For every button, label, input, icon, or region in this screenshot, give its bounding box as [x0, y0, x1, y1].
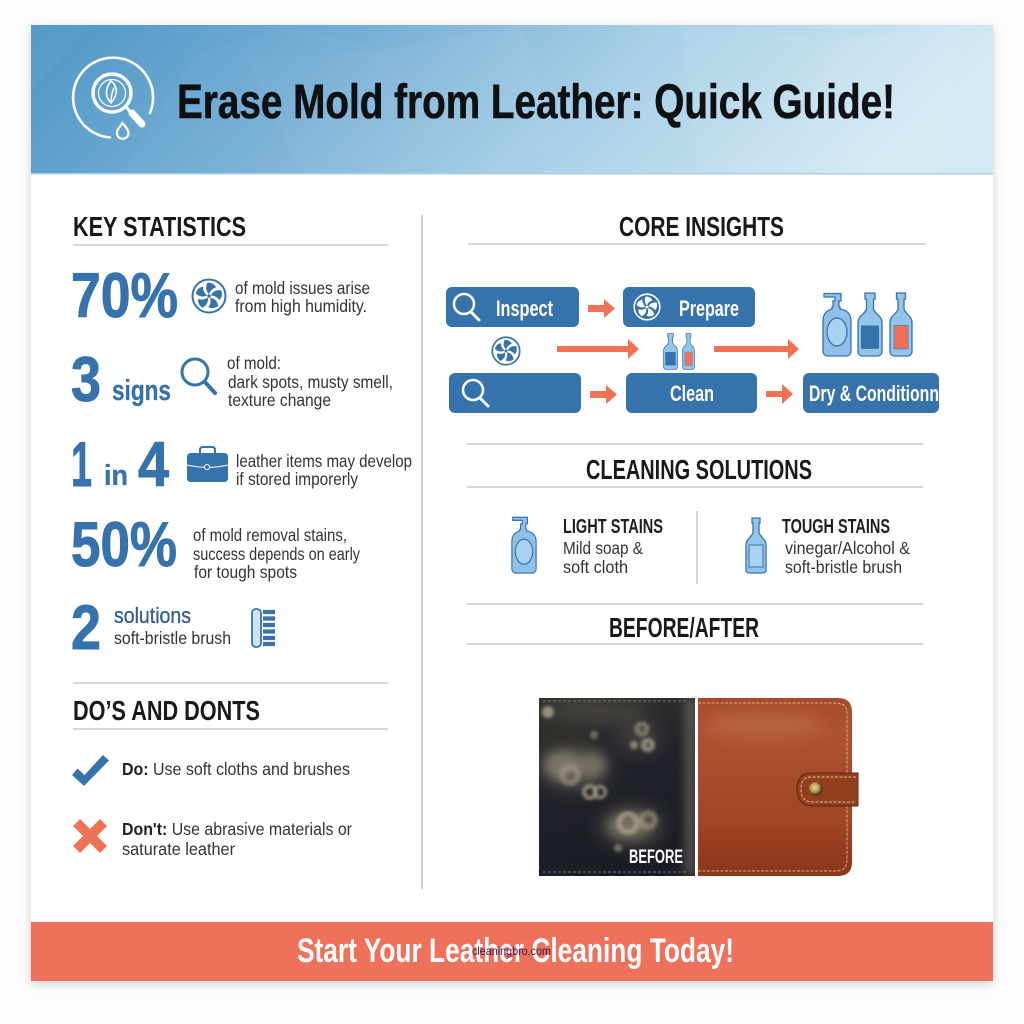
tough stains: soft-bristle brush: [785, 557, 902, 577]
tough stains: vinegar/Alcohol &: [785, 538, 910, 558]
stat: 3 signs: signs: [112, 375, 171, 407]
light stains: [563, 516, 663, 577]
stat: 70%: [71, 261, 370, 331]
stat: 2 solutions: [71, 593, 275, 663]
label: before: BEFORE: [629, 847, 683, 868]
stat: 1 in 4: in: [104, 460, 128, 492]
stat: 1 in 4: [71, 430, 412, 500]
panel: before and after: [467, 612, 923, 876]
light stains: LIGHT STAINS: [563, 516, 663, 538]
icon: small bottles: [664, 334, 694, 369]
stat: 1 in 4: leather items may develop: [236, 451, 412, 471]
header banner: [31, 25, 993, 174]
stat: 1 in 4: if stored imporerly: [236, 469, 358, 489]
stat: 3 signs: of mold:: [227, 353, 281, 373]
step: clean: [626, 373, 757, 413]
stat: 70%: from high humidity.: [235, 296, 367, 316]
heading: key statistics: KEY STATISTICS: [73, 211, 246, 242]
icon: soap bottle: [512, 517, 536, 573]
stat: 3 signs: dark spots, musty smell,: [228, 372, 393, 392]
arrow: middle right: [714, 339, 799, 359]
stat: 2 solutions: soft-bristle brush: [114, 628, 231, 648]
stat: 1 in 4: 4: [138, 430, 169, 500]
step: inspect: Inspect: [496, 296, 553, 321]
stat: 2 solutions: solutions: [114, 603, 191, 628]
arrow: middle left: [557, 339, 639, 359]
stat: 70%: 70%: [71, 261, 178, 331]
light stains: soft cloth: [563, 557, 628, 577]
stat: 3 signs: [71, 345, 393, 415]
icon: check: [72, 755, 109, 786]
panel: key statistics: [71, 211, 412, 663]
icon: fan: [492, 337, 520, 365]
stat: 1 in 4: 1: [71, 430, 92, 500]
panel: do's and don'ts: [72, 695, 388, 859]
image: clean wallet: [698, 698, 858, 876]
heading: cleaning solutions: CLEANING SOLUTIONS: [586, 454, 812, 485]
stat: 2 solutions: 2: [71, 593, 101, 663]
panel: cleaning solutions: [467, 454, 923, 584]
icon: bottle: [746, 518, 766, 573]
stat: 50%: of mold removal stains,: [193, 525, 347, 545]
icon: cross: [73, 819, 107, 853]
footer banner: [31, 922, 993, 981]
heading: before/after: BEFORE/AFTER: [609, 612, 759, 643]
arrow: search to clean: [590, 385, 617, 404]
step: unnamed search: [449, 373, 581, 413]
icon: magnifier with leaf and water drop: [73, 58, 153, 139]
step: dry and condition: [803, 373, 939, 413]
tough stains: TOUGH STAINS: [782, 516, 890, 538]
stat: 50%: 50%: [71, 510, 177, 580]
stat: 50%: [71, 510, 360, 582]
tough stains: [782, 516, 910, 577]
do text: Do: Use soft cloths and brushes: [122, 759, 350, 779]
heading: do's and don'ts: DO’S AND DONTS: [73, 695, 260, 726]
stat: 50%: success depends on early: [193, 544, 360, 564]
stat: 70%: of mold issues arise: [235, 278, 370, 298]
step: inspect: [446, 287, 579, 327]
divider: columns: [421, 215, 423, 889]
watermark: cleaningbro.com: [472, 944, 551, 958]
icon: large bottles: [823, 293, 912, 356]
light stains: Mild soap &: [563, 538, 643, 558]
arrow: clean to dry: [766, 384, 793, 404]
don't text line 2: saturate leather: [122, 839, 235, 859]
step: prepare: Prepare: [679, 296, 739, 321]
step: clean: Clean: [670, 381, 714, 406]
stat: 3 signs: texture change: [228, 390, 331, 410]
step: prepare: [623, 287, 755, 327]
step: dry and condition: Dry & Conditionn: [809, 381, 939, 406]
stat: 50%: for tough spots: [194, 562, 297, 582]
panel: core insights: [446, 211, 939, 413]
image: moldy wallet: [539, 698, 695, 876]
don't text: Don't: Use abrasive materials or: [122, 819, 352, 839]
heading: core insights: CORE INSIGHTS: [619, 211, 784, 242]
call to action: Start Your Leather Cleaning Today!: [297, 932, 734, 970]
stat: 3 signs: 3: [71, 345, 101, 415]
arrow: inspect to prepare: [588, 299, 615, 318]
